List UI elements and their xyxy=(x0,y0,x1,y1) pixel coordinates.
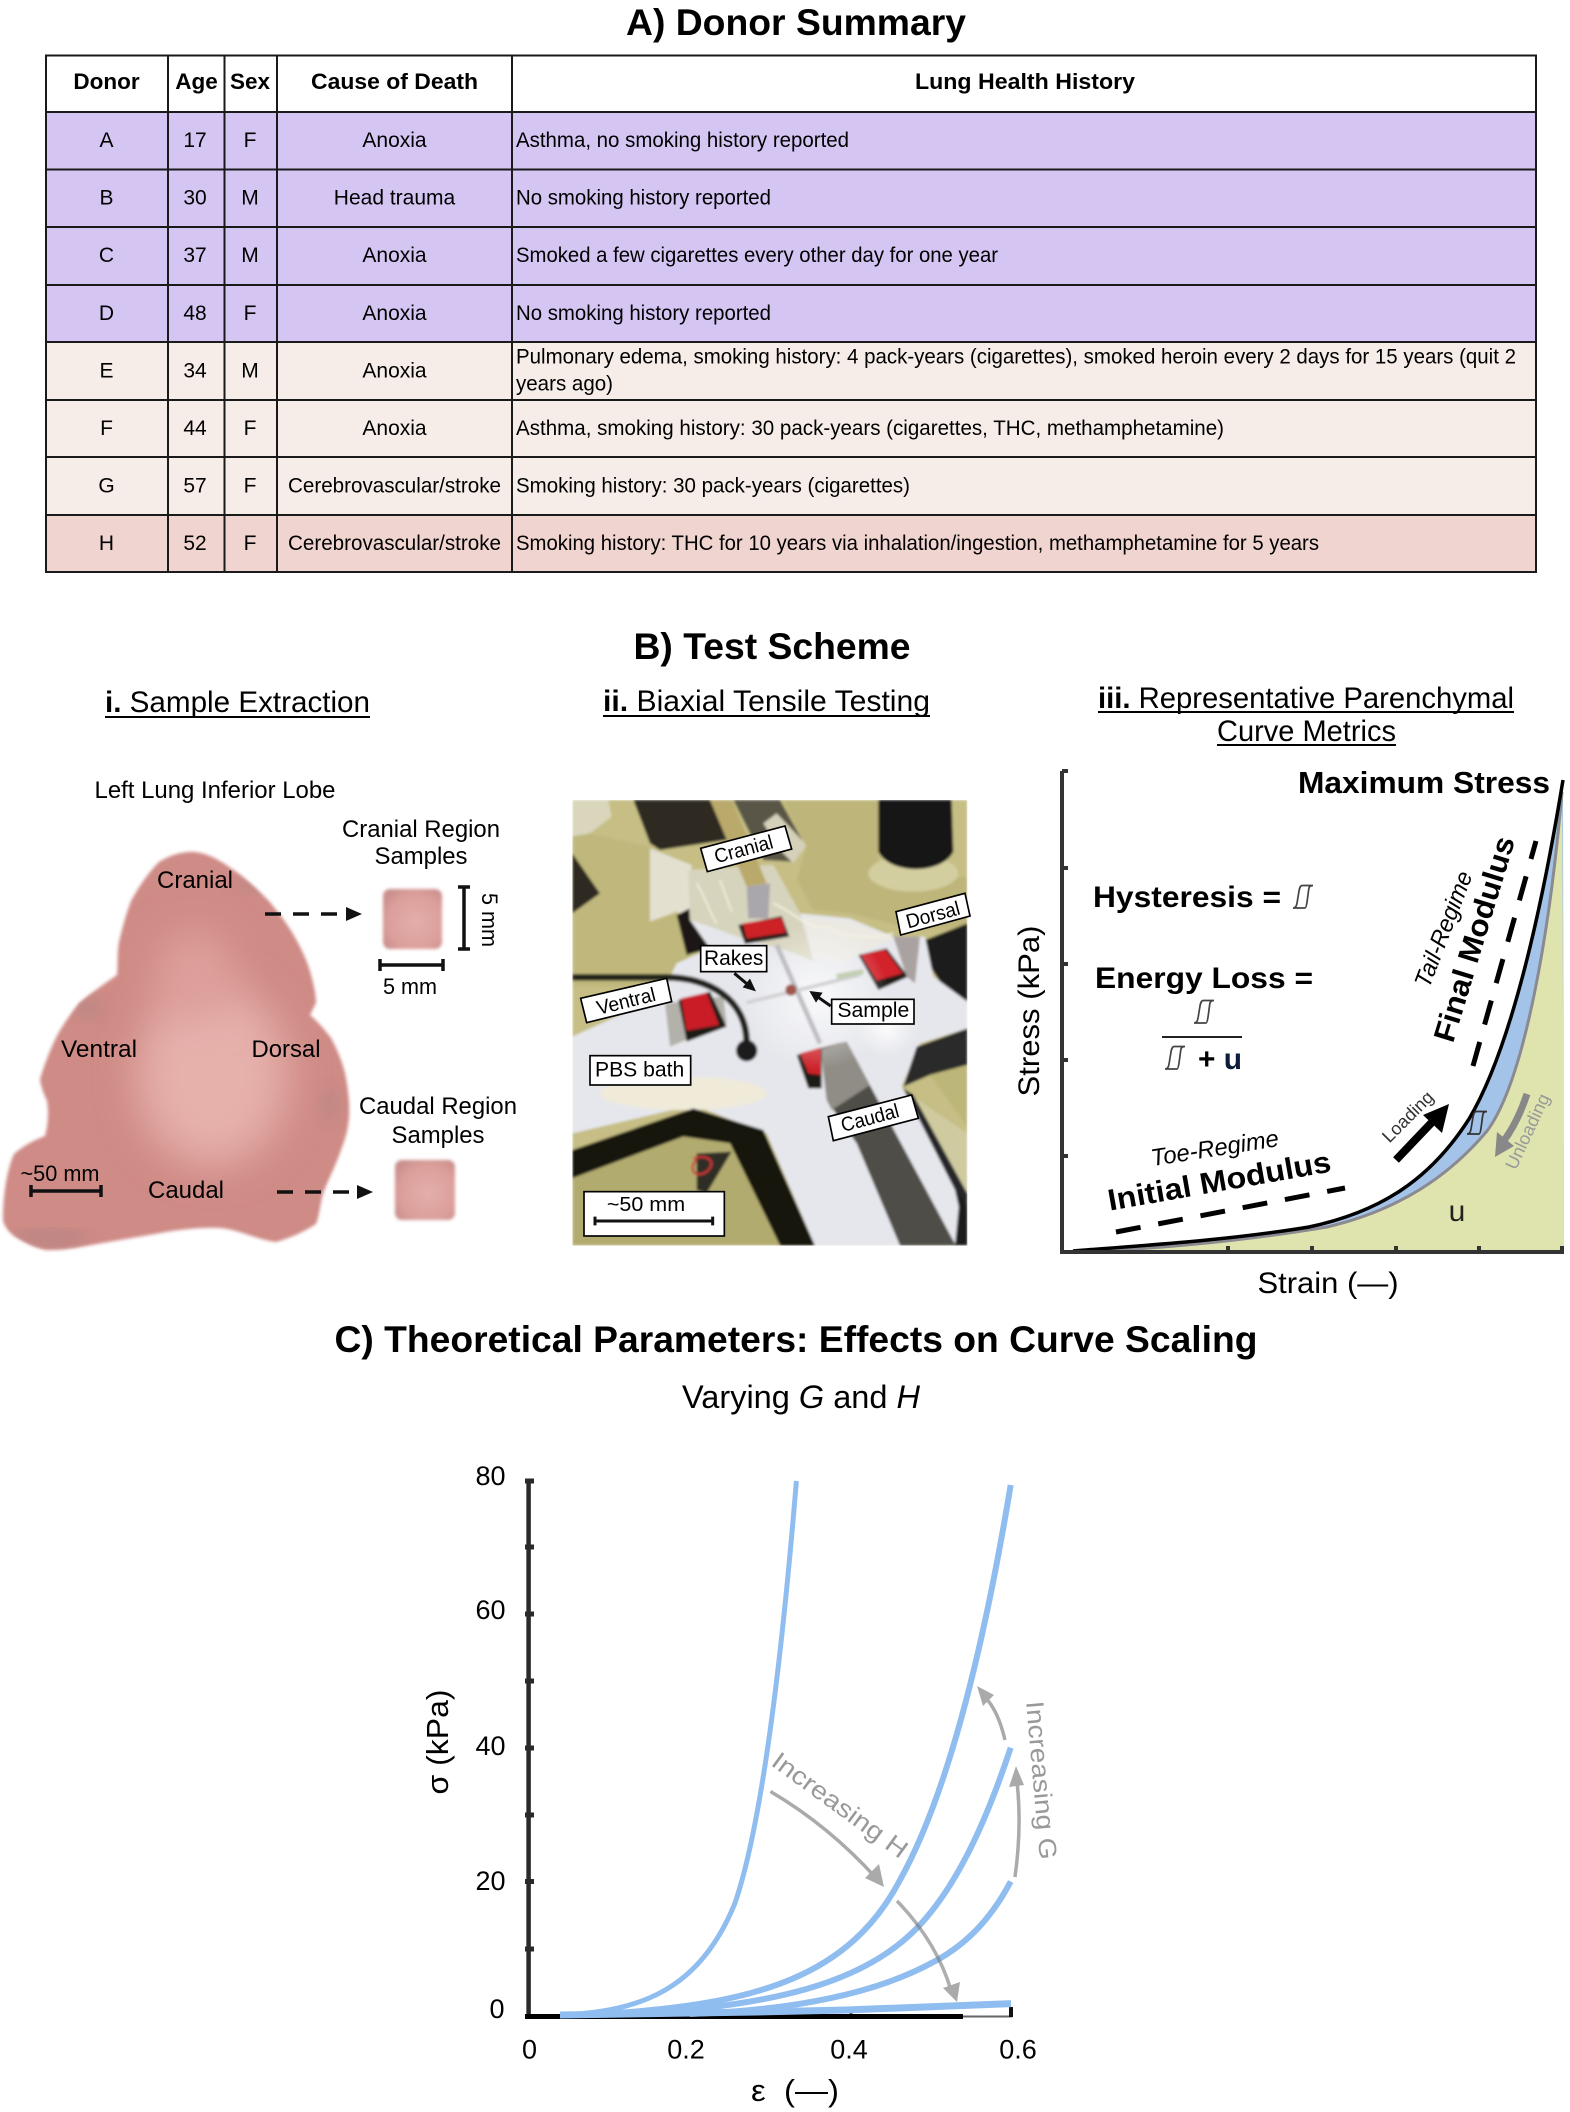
label: PBS bath xyxy=(590,1056,691,1085)
formula: hysteresis: Hysteresis = xyxy=(1093,881,1281,914)
subheading: ii. Biaxial Tensile Testing: ii. Biaxial Tensile Testing xyxy=(603,685,930,718)
row: donor B xyxy=(99,186,771,210)
row: donor C: M xyxy=(241,244,259,267)
y axis labels: 60 xyxy=(475,1595,506,1625)
label: u: u xyxy=(1449,1195,1465,1228)
row: donor E: 34 xyxy=(183,360,207,382)
arrow: unloading: Unloading xyxy=(1501,1091,1554,1172)
row: donor E xyxy=(99,346,1516,396)
photo: biaxial test rig xyxy=(572,800,970,1246)
axis label: sigma: σ (kPa) xyxy=(420,1690,455,1794)
row: donor A: A xyxy=(99,129,114,152)
label: Dorsal: Dorsal xyxy=(904,898,963,933)
panel: ii. biaxial tensile testing xyxy=(572,685,970,1246)
subheading: iii. Representative Parenchymal Curve Metrics: Curve Metrics xyxy=(1217,715,1396,748)
row: donor C: Smoked a few cigarettes every other day for one year xyxy=(516,244,998,267)
label: increasing H: Increasing H xyxy=(766,1747,913,1864)
row: donor E: E xyxy=(99,360,114,382)
panel: i. sample extraction xyxy=(3,686,517,1250)
row: donor H: F xyxy=(244,532,256,555)
scale bar: 5 mm horizontal xyxy=(380,959,443,999)
chart: stress-strain curve xyxy=(1013,765,1564,1300)
row: donor B: No smoking history reported xyxy=(516,186,771,210)
label: maximum stress: Maximum Stress xyxy=(1298,765,1550,800)
row: donor D: F xyxy=(244,302,256,325)
scale bar: 5 mm horizontal: 5 mm xyxy=(383,974,437,999)
label: Cranial xyxy=(701,826,792,872)
row: donor B: 30 xyxy=(183,186,207,210)
row: donor C xyxy=(99,244,998,267)
arrow: loading: Loading xyxy=(1378,1087,1437,1146)
formula: energy loss xyxy=(1095,962,1313,1076)
annotation: tail-regime final modulus: Final Modulus xyxy=(1428,833,1522,1046)
label: Ventral xyxy=(581,978,672,1023)
row: donor D xyxy=(99,302,771,325)
lung labels: Caudal xyxy=(148,1177,224,1204)
scale bar: 5 mm vertical: 5 mm xyxy=(477,893,502,947)
scale bar: ~50 mm lung xyxy=(20,1161,101,1197)
illustration: lung lobe xyxy=(3,852,349,1250)
label: Caudal xyxy=(828,1095,918,1141)
row: donor G: F xyxy=(244,474,256,498)
row: donor E: M xyxy=(241,360,259,382)
arrow: rakes pointer xyxy=(734,973,756,991)
x axis labels: 0.6 xyxy=(999,2034,1037,2064)
caption: cranial region samples: Samples xyxy=(374,843,468,870)
row: donor B: M xyxy=(241,186,259,210)
row: donor H: 52 xyxy=(183,532,207,555)
table: donor summary xyxy=(46,56,1536,572)
label: Sample: Sample xyxy=(837,999,909,1022)
row: donor A: 17 xyxy=(183,129,207,152)
caption: caudal region samples: Caudal Region xyxy=(359,1093,517,1120)
row: donor E: Pulmonary edema, smoking history: 4 pack-years (cigarettes), smoked heroin every 2 days for 15 years (quit 2 xyxy=(516,346,1516,368)
arrow: increasing H upper xyxy=(770,1792,884,1887)
arrow: increasing G lower xyxy=(1009,1766,1024,1877)
row: donor A xyxy=(99,129,849,152)
y axis labels xyxy=(475,1461,506,2024)
x axis labels: 0.2 xyxy=(667,2034,705,2064)
x axis labels xyxy=(522,2034,1037,2064)
row: donor F xyxy=(100,417,1224,440)
row: donor F: F xyxy=(244,417,256,440)
row: donor D: No smoking history reported xyxy=(516,302,771,325)
caption: cranial region samples: Cranial Region xyxy=(342,816,500,843)
table header row: Cause of Death xyxy=(311,69,478,94)
row: donor D: 48 xyxy=(183,302,207,325)
table header row: Age xyxy=(175,69,218,94)
annotation: tail-regime final modulus: Tail-Regime xyxy=(1410,868,1478,991)
row: donor H: Smoking history: THC for 10 years via inhalation/ingestion, methamphetamine for 5 years xyxy=(516,532,1319,555)
icon: cranial tissue sample xyxy=(383,889,442,949)
row: donor A: Asthma, no smoking history reported xyxy=(516,129,849,152)
table header row xyxy=(73,69,1135,94)
heading: B) Test Scheme: B) Test Scheme xyxy=(634,626,910,667)
row: donor E: years ago) xyxy=(516,372,613,396)
chart: curve scaling xyxy=(420,1461,1062,2108)
scale bar: 5 mm vertical xyxy=(458,887,502,949)
label: increasing G: Increasing G xyxy=(1020,1700,1062,1861)
lung labels xyxy=(61,867,320,1204)
row: donor C: Anoxia xyxy=(362,244,427,267)
arrow: loading xyxy=(1378,1087,1449,1160)
y axis labels: 40 xyxy=(475,1731,506,1761)
heading: C) Theoretical Parameters: C) Theoretical Parameters: Effects on Curve Scaling xyxy=(334,1319,1258,1360)
formula: energy loss: Energy Loss = xyxy=(1095,962,1313,995)
row: donor B: B xyxy=(99,186,114,210)
curves: model responses xyxy=(560,1481,1011,2015)
annotation: toe-regime initial modulus: Toe-Regime xyxy=(1149,1125,1281,1172)
y axis labels: 80 xyxy=(475,1461,506,1491)
row: donor C: C xyxy=(99,244,114,267)
scale bar: ~50 mm photo: ~50 mm xyxy=(607,1194,685,1216)
scale bar: ~50 mm lung: ~50 mm xyxy=(20,1161,100,1186)
caption: left lung inferior lobe: Left Lung Inferior Lobe xyxy=(94,777,336,804)
label: Cranial: Cranial xyxy=(712,831,776,868)
row: donor D: Anoxia xyxy=(362,302,427,325)
subheading: varying G and H: Varying G and H xyxy=(682,1379,921,1415)
lung labels: Cranial xyxy=(157,867,233,894)
row: donor G: Smoking history: 30 pack-years (cigarettes) xyxy=(516,474,910,498)
lung labels: Ventral xyxy=(61,1036,137,1063)
caption: cranial region samples xyxy=(342,816,500,870)
label: PBS bath: PBS bath xyxy=(595,1058,684,1081)
subheading: iii. Representative Parenchymal Curve Metrics: iii. Representative Parenchymal xyxy=(1098,682,1514,715)
arrow: caudal to sample xyxy=(277,1185,373,1199)
row: donor G: 57 xyxy=(183,474,207,498)
axes xyxy=(1062,771,1564,1252)
caption: caudal region samples: Samples xyxy=(392,1122,484,1149)
arrow: cranial to sample xyxy=(265,907,362,921)
row: donor G: G xyxy=(98,474,115,498)
row: donor F: Asthma, smoking history: 30 pack-years (cigarettes, THC, methamphetamine) xyxy=(516,417,1224,440)
y axis labels: 20 xyxy=(475,1866,506,1896)
row: donor E: Anoxia xyxy=(362,360,427,382)
row: donor F: F xyxy=(100,417,113,440)
subheading: i. Sample Extraction: i. Sample Extraction xyxy=(105,686,370,719)
y axis labels: 0 xyxy=(489,1994,505,2024)
row: donor F: 44 xyxy=(183,417,207,440)
lung labels: Dorsal xyxy=(252,1036,320,1063)
table header row: Lung Health History xyxy=(915,69,1135,94)
arrow: increasing G upper xyxy=(977,1686,1005,1740)
panel: iii. curve metrics xyxy=(1013,682,1564,1300)
row: donor G xyxy=(98,474,910,498)
row: donor C: 37 xyxy=(183,244,207,267)
arrow: sample pointer xyxy=(809,991,831,1006)
label: Ventral: Ventral xyxy=(594,984,658,1020)
formula: energy loss: + u xyxy=(1198,1043,1242,1076)
arrow: increasing H lower xyxy=(897,1901,960,2002)
curve: loading xyxy=(1073,780,1563,1251)
x axis labels: 0 xyxy=(522,2034,537,2064)
annotation: tail-regime final modulus xyxy=(1410,833,1536,1066)
row: donor G: Cerebrovascular/stroke xyxy=(288,474,501,498)
scale bar: ~50 mm photo xyxy=(584,1192,724,1236)
curve: unloading xyxy=(1073,792,1562,1252)
annotation: toe-regime initial modulus xyxy=(1105,1125,1345,1232)
axis label: stress: Stress (kPa) xyxy=(1013,926,1046,1096)
label: Caudal: Caudal xyxy=(839,1100,902,1137)
row: donor A: F xyxy=(244,129,256,152)
row: donor H xyxy=(99,532,1319,555)
x axis labels: 0.4 xyxy=(830,2034,868,2064)
subheading: iii. Representative Parenchymal Curve Metrics xyxy=(1098,682,1514,748)
table header row: Sex xyxy=(230,69,270,94)
axis label: strain: Strain (—) xyxy=(1258,1267,1398,1300)
axes xyxy=(525,1481,1012,2017)
label: Rakes: Rakes xyxy=(704,947,763,970)
icon: hysteresis area xyxy=(1467,1112,1487,1134)
heading: A) Donor Summary: A) Donor Summary xyxy=(626,2,966,43)
axis label: epsilon: ε (—) xyxy=(751,2073,839,2108)
table header row: Donor xyxy=(73,69,140,94)
caption: caudal region samples xyxy=(359,1093,517,1149)
row: donor H: Cerebrovascular/stroke xyxy=(288,532,501,555)
icon: caudal tissue sample xyxy=(395,1160,455,1220)
row: donor F: Anoxia xyxy=(362,417,427,440)
annotation: toe-regime initial modulus: Initial Modulus xyxy=(1105,1146,1333,1218)
area: recovered energy u xyxy=(1073,780,1564,1252)
row: donor B: Head trauma xyxy=(334,186,456,210)
row: donor H: H xyxy=(99,532,114,555)
row: donor D: D xyxy=(99,302,114,325)
row: donor A: Anoxia xyxy=(362,129,427,152)
